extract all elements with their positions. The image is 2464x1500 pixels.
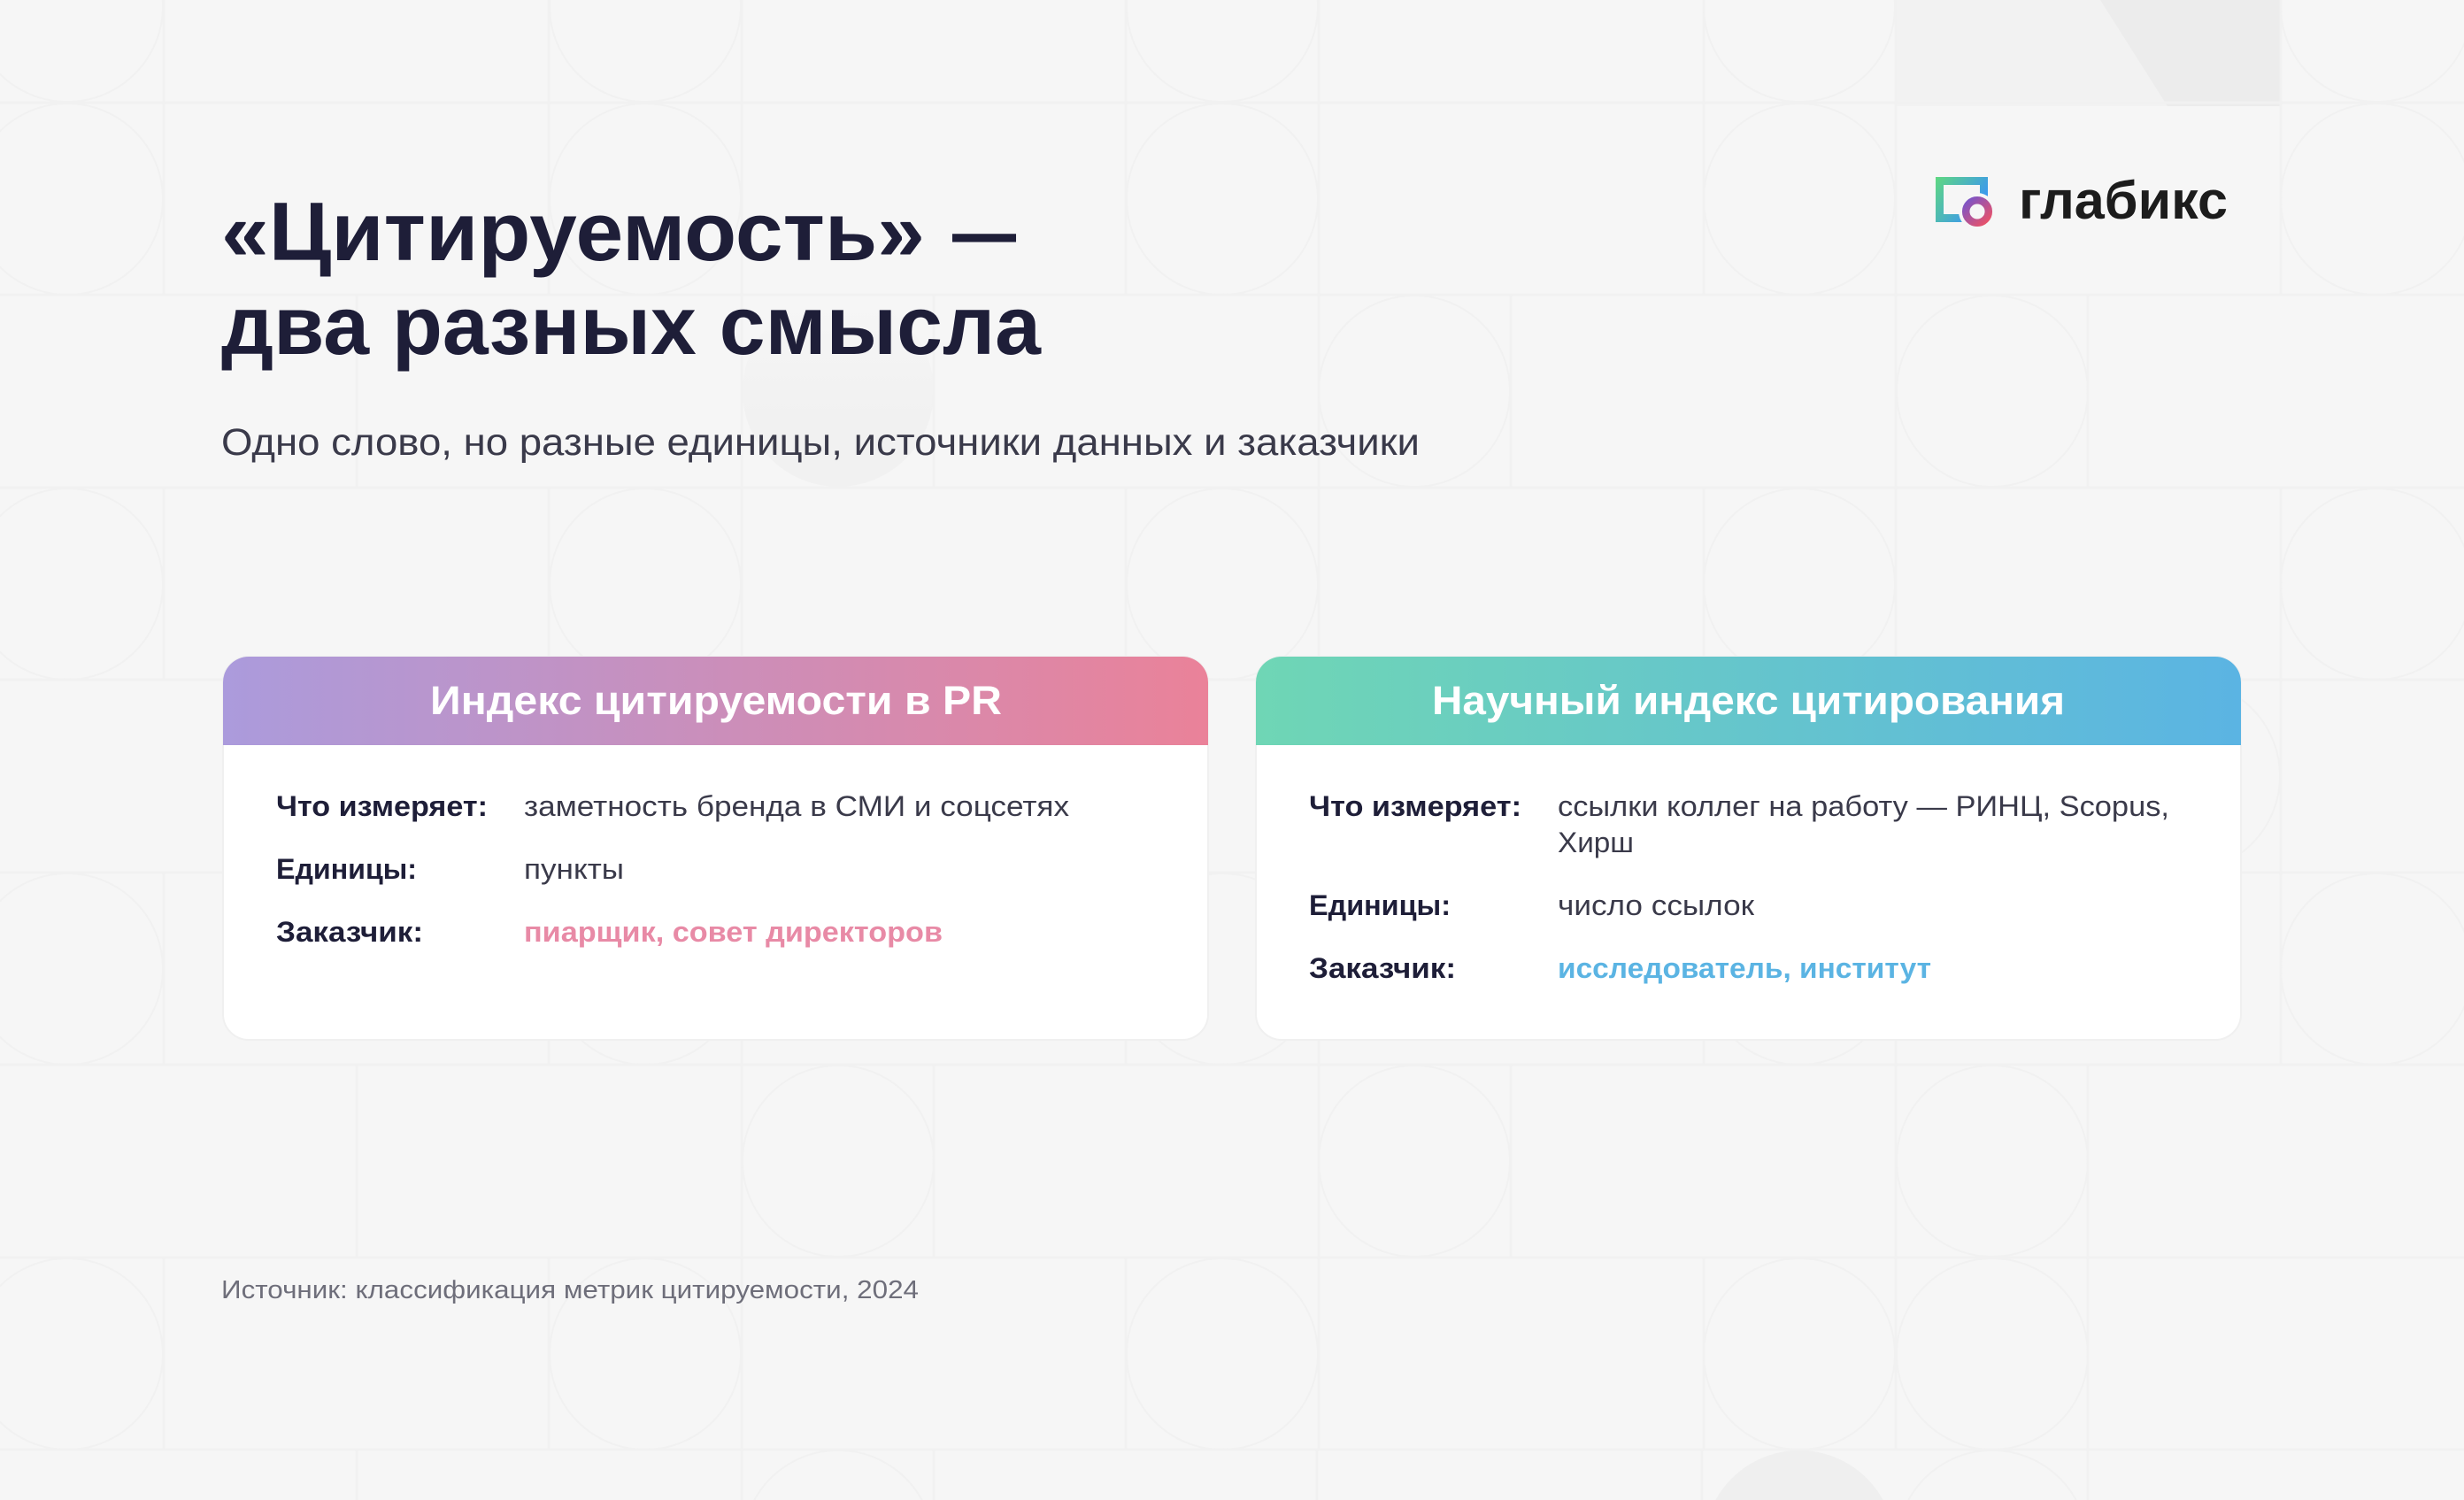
heading: PR: Индекс цитируемости в PR: [430, 678, 1002, 723]
row: заказчик: [276, 916, 943, 948]
row: что измеряет: Что измеряет:: [1309, 790, 1521, 822]
panel header: PR: [223, 657, 1208, 745]
title: «Цитируемость»: [221, 185, 925, 278]
panel: scientific citation index: [1256, 657, 2241, 1040]
logo: глабикс: [1936, 171, 2228, 230]
row: единицы: пункты: [524, 853, 624, 885]
source note: Источник: классификация метрик цитируемости, 2024: [221, 1276, 919, 1304]
icon: logo mark: [1936, 177, 1996, 230]
row: заказчик: пиарщик, совет директоров: [524, 916, 943, 948]
row: что измеряет: Хирш: [1558, 827, 1634, 858]
row: единицы: [276, 853, 624, 885]
row: единицы: число ссылок: [1558, 889, 1755, 921]
logo wordmark: глабикс: [2019, 171, 2228, 230]
row: что измеряет: [1309, 790, 2169, 858]
row: заказчик: Заказчик:: [1309, 952, 1456, 984]
row: что измеряет: Что измеряет:: [276, 790, 488, 822]
row: что измеряет: заметность бренда в СМИ и соцсетях: [524, 790, 1069, 822]
title: —: [952, 185, 1016, 278]
row: что измеряет: ссылки коллег на работу — РИНЦ, Scopus,: [1558, 790, 2169, 822]
subtitle: Одно слово, но разные единицы, источники данных и заказчики: [221, 421, 1420, 464]
row: заказчик: [1309, 952, 1931, 984]
row: заказчик: Заказчик:: [276, 916, 423, 948]
row: единицы: Единицы:: [276, 853, 417, 885]
heading: science: Научный индекс цитирования: [1432, 678, 2065, 723]
row: что измеряет: [276, 790, 1069, 822]
row: заказчик: исследователь, институт: [1558, 952, 1931, 984]
row: единицы: Единицы:: [1309, 889, 1451, 921]
panel header: science: [1256, 657, 2241, 745]
title: два разных смысла: [221, 279, 1042, 372]
row: единицы: [1309, 889, 1755, 921]
panel: PR citation index: [223, 657, 1208, 1040]
